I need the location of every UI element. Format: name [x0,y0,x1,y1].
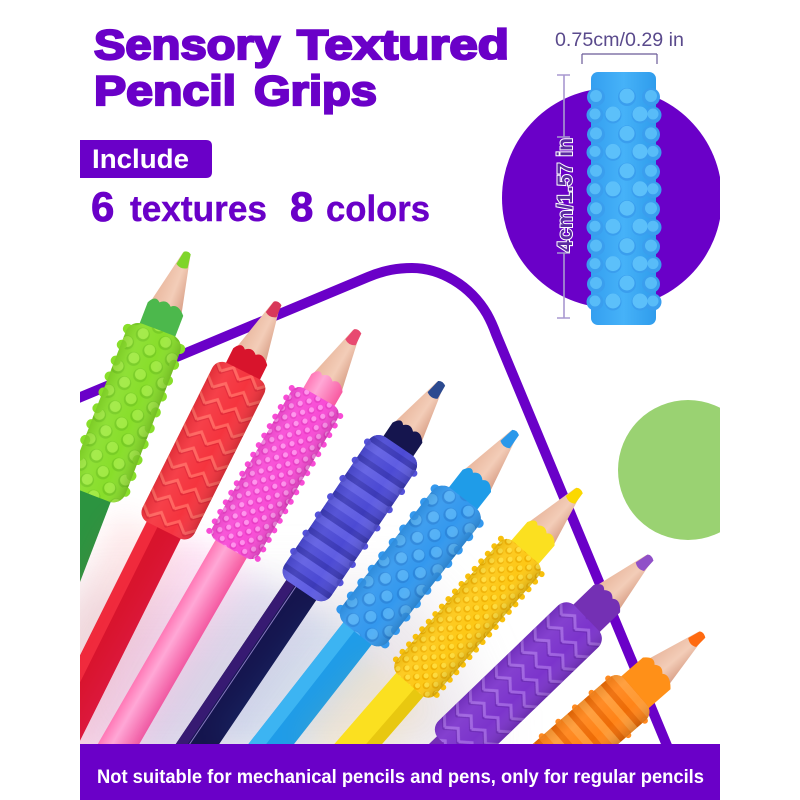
decorative purple circle [502,88,722,308]
title: Grips [254,67,377,114]
standalone blue bump grip [591,72,656,325]
badge: Include [80,140,212,178]
soft backdrop shadow [80,576,477,744]
title: Textured [297,21,509,68]
width dimension: 0.75cm/0.29 in [555,30,684,51]
pencil: navy with violet ribbed grip [140,381,446,744]
pencil: red with zigzag grip [80,301,282,744]
footer banner: Not suitable for mechanical pencils and pens, only for regular pencils [97,767,704,788]
title: Sensory [94,21,281,68]
title: Pencil [94,67,236,114]
counts: textures and colors [91,183,430,230]
purple rounded frame line [76,268,668,748]
title [94,21,509,114]
pencil: green with bump grip [80,251,191,582]
length dimension [554,75,577,318]
pencil: orange with ribbed grip [532,631,706,744]
pencils with textured grips [80,251,706,744]
counts: textures and colors: 6 [91,183,114,230]
photo area [80,72,720,744]
badge: Include: Include [92,144,189,174]
pencil: light blue with bump grip [226,430,519,744]
pencil: yellow with spiky grip [303,488,583,744]
pencil: pink with spiky grip [80,329,362,744]
counts: textures and colors: 8 [290,183,313,230]
footer banner [80,744,720,800]
counts: textures and colors: textures [130,188,267,229]
length dimension: 4cm/1.57 in [554,138,577,252]
decorative green circle [618,400,720,540]
width dimension [555,30,684,64]
pencil: purple with zigzag grip [429,554,654,744]
counts: textures and colors: colors [326,188,430,229]
